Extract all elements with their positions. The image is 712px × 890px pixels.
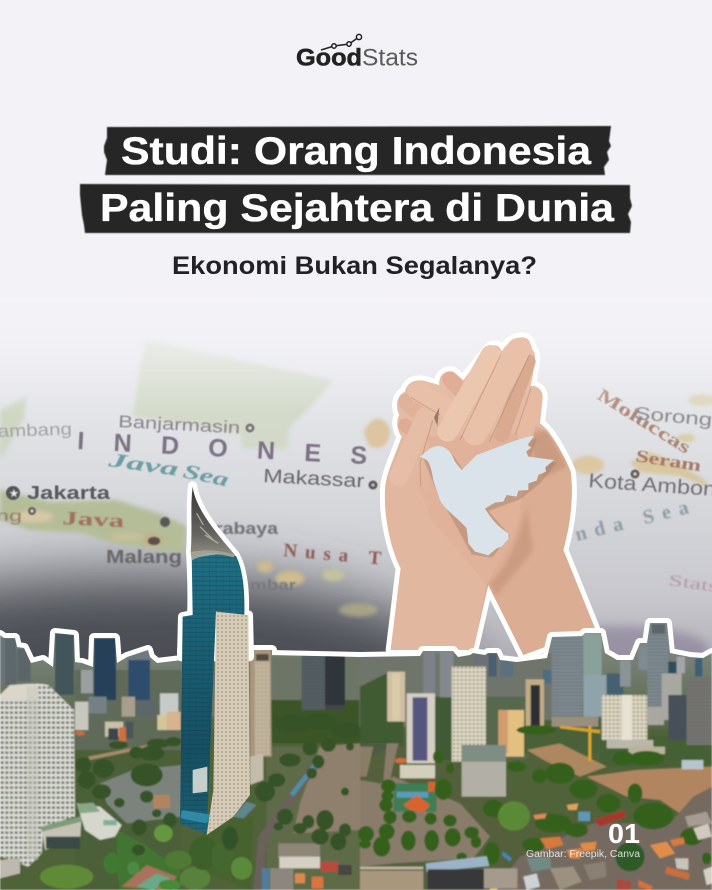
map labels: Jakarta: [27, 483, 111, 503]
map labels: ★: [9, 488, 19, 500]
map background: Indonesia: Kota Ambon: [588, 470, 712, 501]
map background: Indonesia: Sorong: [634, 403, 712, 430]
map background: Indonesia: Malang: [106, 547, 182, 567]
map background: Indonesia: Nusa T: [283, 540, 382, 570]
aerial city photo: [0, 620, 712, 890]
title tape line 1: Studi: Orang Indonesia: [121, 130, 592, 173]
logo: GoodStats: Good: [296, 44, 362, 72]
map background: Indonesia: Seram: [634, 446, 703, 475]
map labels: Sea: [181, 460, 231, 491]
icon: paper dove: [420, 436, 554, 555]
hands holding paper dove: [385, 337, 595, 655]
hotel tower, left foreground: [0, 683, 122, 878]
map labels: Java: [106, 449, 180, 481]
map labels: [0, 412, 378, 515]
map labels: Banjarmasin: [118, 412, 241, 437]
map labels: INDONES: [77, 427, 368, 470]
logo chart icon: [321, 34, 362, 50]
map labels: Makassar: [263, 466, 366, 492]
subtitle: Ekonomi Bukan Segalanya?: [172, 252, 537, 280]
title tape line 2: Paling Sejahtera di Dunia: [100, 187, 615, 230]
logo: GoodStats: Stats: [362, 44, 418, 72]
city skyline outline: [0, 623, 712, 890]
map background: Indonesia: Java: [62, 508, 126, 532]
right city: towers, construction and kampung: [358, 623, 712, 890]
hero tower: [180, 486, 250, 835]
logo: GoodStats: [296, 34, 418, 72]
map background: Indonesia: nda Sea: [573, 496, 691, 546]
map background: Indonesia: rabaya: [215, 519, 279, 538]
map background: Indonesia: mbar: [250, 577, 296, 594]
kampung roofs: [490, 803, 712, 890]
map background: Indonesia: Stats: [667, 572, 712, 596]
side tan tower behind hero tower: [233, 645, 272, 818]
image credit: Gambar: Freepik, Canva: [526, 849, 640, 860]
map background: Indonesia: [0, 290, 712, 785]
left city: towers and parkland: [0, 633, 363, 890]
map background: Indonesia: Moluccas: [594, 384, 694, 458]
page number: 01: [608, 818, 640, 849]
